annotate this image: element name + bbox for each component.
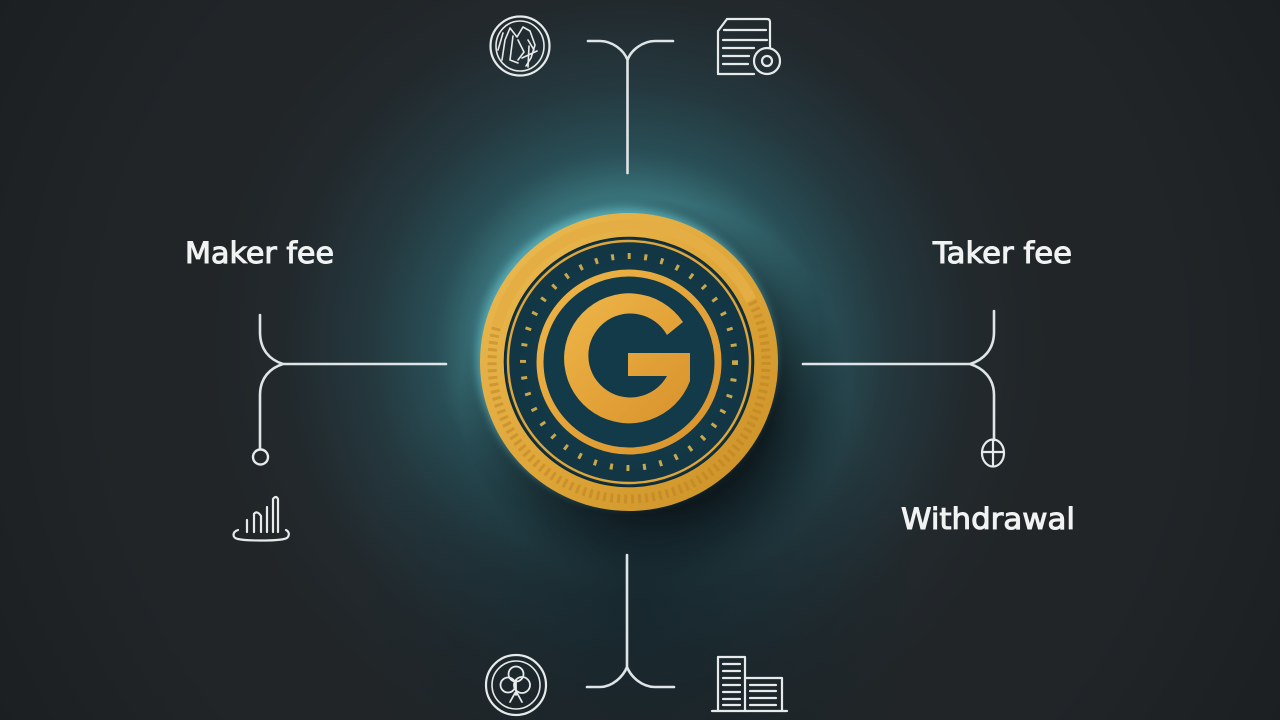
rim engraving	[492, 225, 766, 499]
connector: top	[588, 41, 673, 173]
coin rim	[480, 213, 778, 511]
label: Withdrawal: Withdrawal	[901, 502, 1075, 536]
gold coin	[461, 194, 797, 530]
icon: document with coin	[718, 19, 780, 74]
icon: globe sketch	[490, 16, 550, 76]
icon: bar chart dish	[234, 497, 289, 540]
icon: people badge	[486, 655, 546, 715]
connector: right	[803, 311, 994, 440]
ring tick marks	[523, 256, 735, 468]
label: Taker fee: Taker fee	[932, 236, 1072, 270]
connector: bottom	[587, 555, 674, 687]
connector: left	[260, 315, 446, 449]
icon: buildings	[712, 657, 787, 711]
icon: node circle	[253, 450, 268, 464]
inner gold ring	[540, 273, 718, 451]
coin glow and shadow	[460, 200, 850, 590]
letter G	[564, 293, 690, 423]
icon: oval target	[982, 440, 1004, 466]
label: Maker fee: Maker fee	[185, 236, 334, 270]
dark ring band	[504, 238, 754, 486]
